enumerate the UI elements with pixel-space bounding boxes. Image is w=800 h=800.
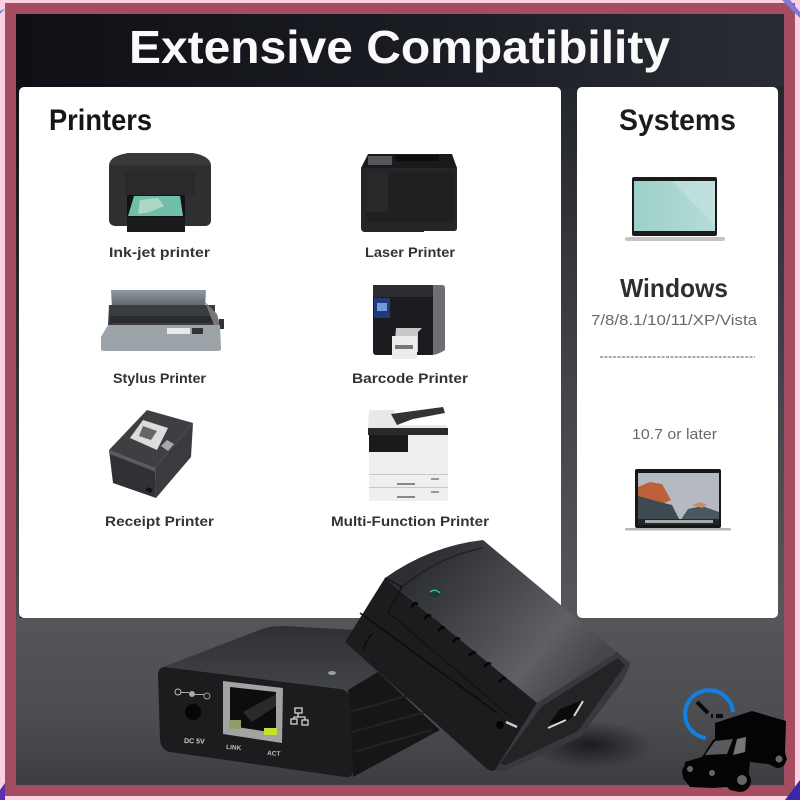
icon: barcode printer [373,285,445,359]
reset label [506,722,517,727]
label: link: LINK [226,744,242,752]
panel: printers [19,87,561,618]
label: act: ACT [267,750,281,758]
truck windshield [705,739,733,755]
tilted status led [429,588,441,598]
heading: printers: Printers [49,104,152,137]
label: ink-jet printer: Ink-jet printer [109,244,211,260]
icon: ink-jet printer [109,153,211,232]
heading: systems: Systems [619,104,736,137]
hubcaps [687,756,782,785]
label: multi-function printer: Multi-Function Printer [331,513,490,529]
title: Extensive Compatibility [129,21,670,73]
icon: stylus printer [101,290,224,351]
usb port [548,700,583,728]
tilted top face [385,540,617,703]
icon: multi-function printer [368,407,448,501]
icon: mac laptop [625,469,731,530]
adapter top [163,626,420,700]
icon: windows laptop [625,177,725,241]
truck side window [733,737,746,755]
panel: systems [577,87,778,618]
device: tilted network adapter [345,540,630,772]
clock ring [685,690,733,738]
ethernet port [223,681,283,743]
tilted end face [495,652,630,772]
floor [16,618,784,785]
reset hole [496,721,504,729]
label: mac version: 10.7 or later [632,426,717,443]
label: stylus printer: Stylus Printer [113,370,207,386]
label: windows versions: 7/8/8.1/10/11/XP/Vista [591,312,758,329]
power jack [175,689,210,720]
label: windows: Windows [620,273,728,303]
clock hands [697,702,723,716]
icon: delivery truck badge [682,690,787,792]
adapter front face [158,667,353,777]
device: front network adapter [158,626,440,777]
icon: laser printer [361,154,457,232]
shadow under tilted device [528,721,652,769]
right gutter shading [561,87,784,619]
status led [328,671,336,675]
label: barcode printer: Barcode Printer [352,370,469,386]
left edge shading [16,87,20,619]
label: receipt printer: Receipt Printer [105,513,215,529]
ridge ticks [411,603,506,682]
truck [683,711,787,792]
tilted ridge face [345,578,537,771]
icon: network [291,708,308,725]
label: laser printer: Laser Printer [365,244,456,260]
icon: receipt printer [109,410,193,498]
wheels [682,752,786,792]
adapter side [348,672,440,777]
label: dc 5v: DC 5V [184,738,205,746]
